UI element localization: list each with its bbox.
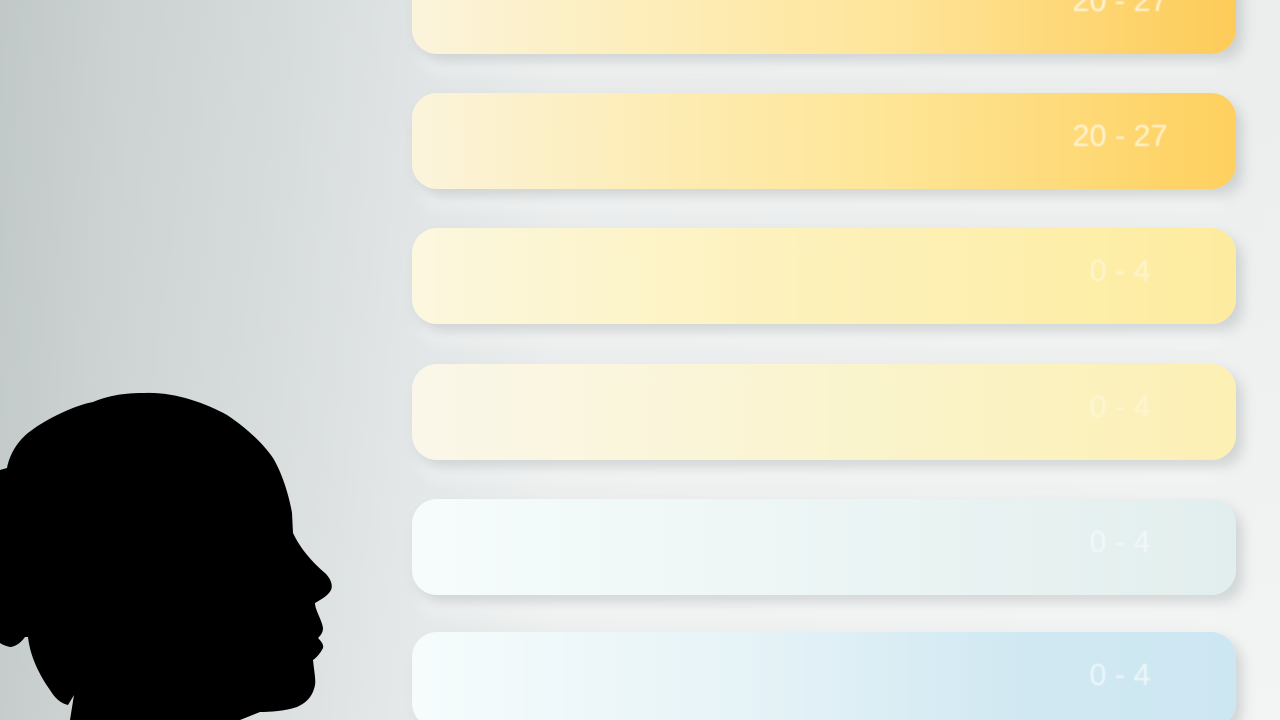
bar 2: 20 - 27 — [412, 93, 1236, 189]
value 20 - 27: 20 - 27 — [1073, 119, 1167, 153]
value 0 - 4: 0 - 4 — [1089, 525, 1151, 559]
bar 1: partly cropped, 20 - 27 — [412, 0, 1236, 54]
bar 4: 0 - 4 — [412, 364, 1236, 460]
bar 6: partly cropped, 0 - 4 — [412, 632, 1236, 720]
bar 3: 0 - 4 — [412, 228, 1236, 324]
value 0 - 4: 0 - 4 — [1089, 390, 1151, 424]
value 0 - 4: 0 - 4 — [1089, 658, 1151, 692]
value 0 - 4: 0 - 4 — [1089, 254, 1151, 288]
bar 5: 0 - 4 — [412, 499, 1236, 595]
